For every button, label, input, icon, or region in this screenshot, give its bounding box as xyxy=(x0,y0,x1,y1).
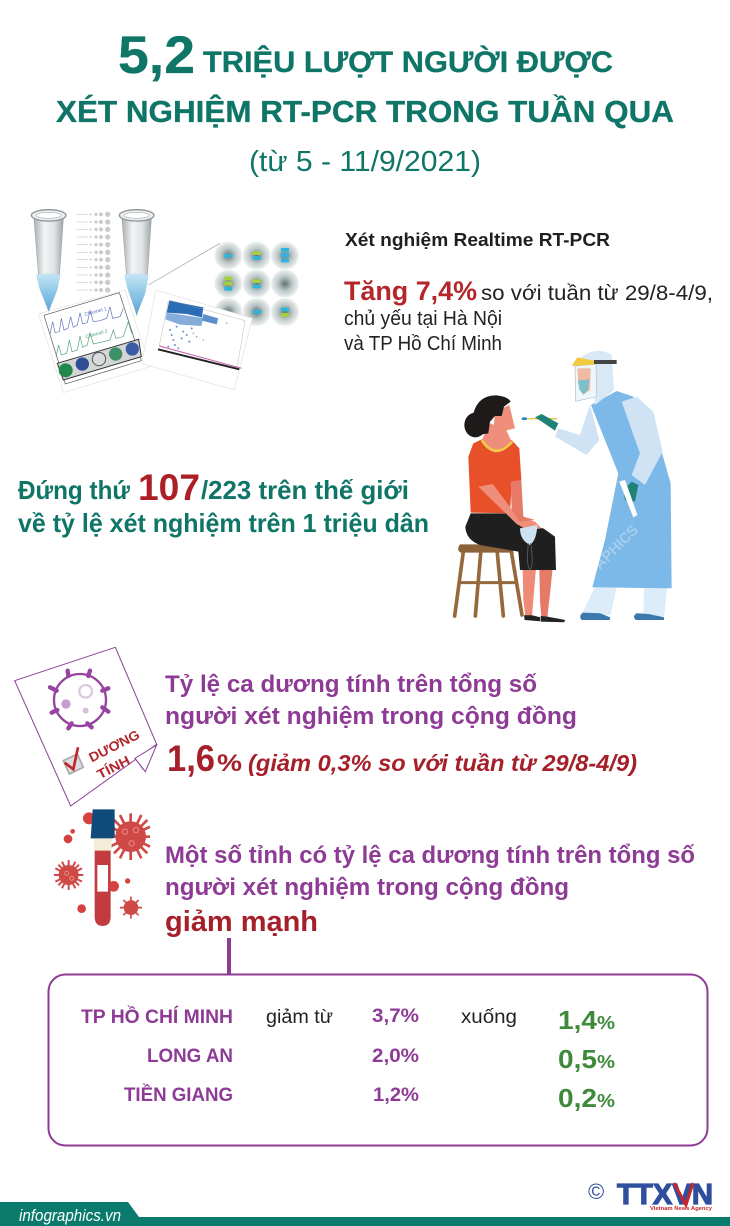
chart card: channel traces: Channel 2 xyxy=(85,329,109,340)
subtitle: date range: (từ 5 - 11/9/2021) xyxy=(249,146,481,178)
row: Tiền Giang xyxy=(124,1083,615,1113)
positive checkbox xyxy=(63,747,83,774)
row: Long An: LONG AN xyxy=(147,1045,233,1067)
stat: increase 7.4%: Tăng 7,4% xyxy=(344,276,477,306)
stat: world ranking xyxy=(18,467,429,538)
stat: increase 7.4%: và TP Hồ Chí Minh xyxy=(344,333,502,355)
row: TP Hồ Chí Minh: 3,7% xyxy=(372,1006,419,1027)
title: TRIỆU LƯỢT NGƯỜI ĐƯỢC xyxy=(203,45,613,79)
logo: TTXVN: © xyxy=(588,1179,604,1204)
label: positive xyxy=(86,727,142,782)
health worker: APHICS xyxy=(591,522,642,573)
stat: world ranking: về tỷ lệ xét nghiệm trên 1 triệu dân xyxy=(18,508,429,538)
panel: provinces table xyxy=(48,974,708,1146)
dotted transfer pattern xyxy=(77,212,110,293)
heading: provinces: người xét nghiệm trong cộng đồng xyxy=(165,874,569,901)
stat: 1.6%: 1,6 xyxy=(167,738,215,779)
title: XÉT NGHIỆM RT-PCR TRONG TUẦN QUA xyxy=(56,93,674,129)
logo: TTXVN: TTXVN xyxy=(617,1179,713,1211)
label: positive: DƯƠNG xyxy=(86,727,142,765)
stat: increase 7.4%: so với tuần từ 29/8-4/9, xyxy=(481,281,713,305)
label: test type: Xét nghiệm Realtime RT-PCR xyxy=(345,229,610,250)
heading: provinces xyxy=(165,842,695,901)
row: Tiền Giang: 0,2 xyxy=(558,1083,597,1113)
heading: provinces: Một số tỉnh có tỷ lệ ca dương tính trên tổng số xyxy=(165,842,695,869)
row: Long An: 2,0% xyxy=(372,1046,419,1067)
icon: well grid xyxy=(214,241,299,326)
chart card: channel traces xyxy=(38,290,150,393)
stat: world ranking: 107 xyxy=(138,467,200,508)
label: positive: TÍNH xyxy=(95,753,133,782)
woman xyxy=(464,395,565,622)
row: TP Hồ Chí Minh: 1,4 xyxy=(558,1005,598,1035)
row: Tiền Giang: TIỀN GIANG xyxy=(124,1083,233,1106)
title xyxy=(56,26,674,129)
logo: TTXVN: Vietnam News Agency xyxy=(650,1206,713,1212)
stat: world ranking: Đứng thứ xyxy=(18,475,130,505)
icon: blood tube and viruses xyxy=(54,809,150,926)
stool xyxy=(455,552,522,616)
title: 5,2 xyxy=(118,26,195,85)
row: TP Hồ Chí Minh: giảm từ xyxy=(266,1007,333,1028)
stat: increase 7.4% xyxy=(344,276,713,355)
icon: right test tube xyxy=(119,210,154,315)
stat: 1.6%: (giảm 0,3% so với tuần từ 29/8-4/9) xyxy=(248,750,637,776)
row: Tiền Giang: 1,2% xyxy=(373,1085,419,1106)
emphasis: sharply decreased: giảm mạnh xyxy=(165,906,318,938)
stat: increase 7.4%: chủ yếu tại Hà Nội xyxy=(344,308,502,330)
row: Long An: 0,5 xyxy=(558,1044,597,1074)
footer band xyxy=(0,1202,730,1226)
illustration: nasal swab test xyxy=(455,351,672,622)
heading: positive rate: người xét nghiệm trong cộng đồng xyxy=(165,703,577,730)
row: Long An: % xyxy=(597,1052,615,1072)
illustration: RT-PCR lab test xyxy=(31,210,299,393)
chart card: scatter plot xyxy=(142,290,252,390)
viruses xyxy=(54,813,150,919)
stat: 1.6%: % xyxy=(217,750,242,777)
row: TP Hồ Chí Minh: TP HỒ CHÍ MINH xyxy=(81,1004,233,1028)
row: TP Hồ Chí Minh: % xyxy=(597,1013,615,1033)
health worker xyxy=(535,351,672,620)
footer: website: infographics.vn xyxy=(19,1206,121,1225)
row: TP Hồ Chí Minh xyxy=(81,1004,615,1035)
icon: left test tube xyxy=(31,210,66,312)
heading: positive rate: Tỷ lệ ca dương tính trên tổng số xyxy=(165,671,537,698)
row: TP Hồ Chí Minh: xuống xyxy=(461,1007,517,1028)
row: Long An xyxy=(147,1044,615,1074)
stat: 1.6% xyxy=(167,738,637,779)
virus xyxy=(50,671,108,728)
icon: positive test paper xyxy=(15,647,157,806)
swab xyxy=(522,417,557,421)
stat: world ranking: /223 trên thế giới xyxy=(201,475,409,505)
row: Tiền Giang: % xyxy=(597,1091,615,1111)
chart card: channel traces: Channel 1 xyxy=(84,306,108,318)
tube xyxy=(95,850,111,926)
connector xyxy=(227,938,231,974)
heading: positive rate xyxy=(165,671,577,730)
